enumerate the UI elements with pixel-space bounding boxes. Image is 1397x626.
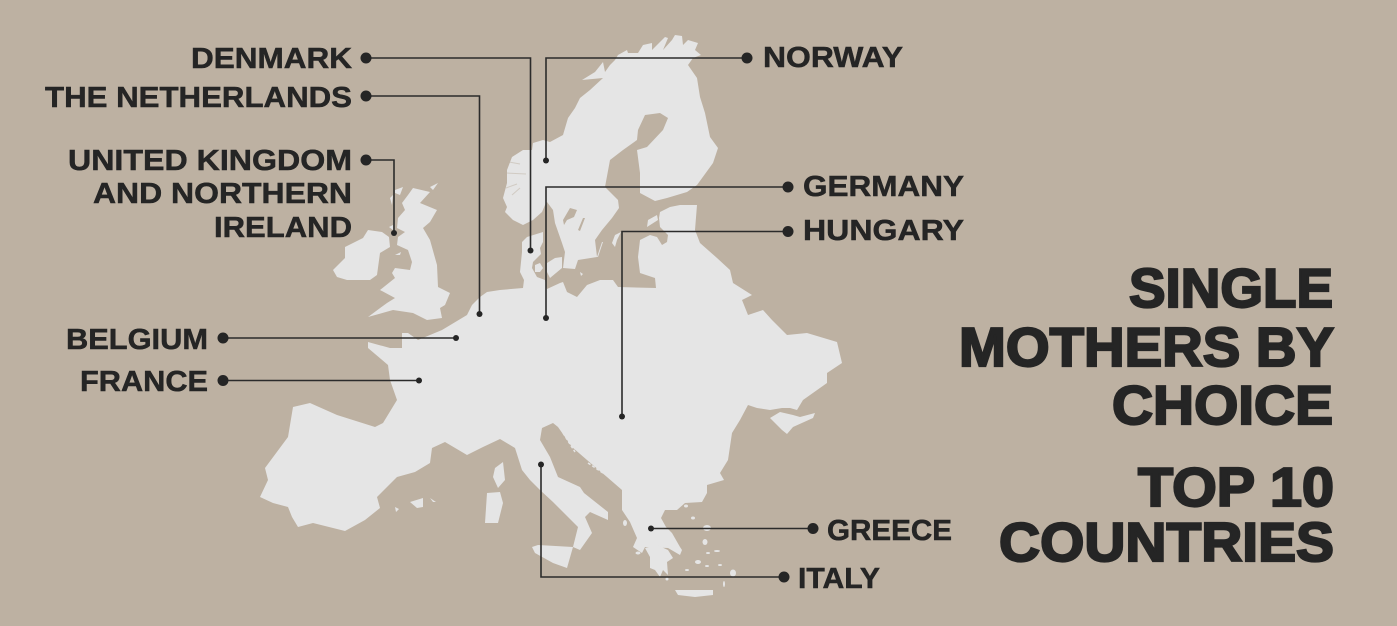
- continental Europe: [260, 205, 842, 555]
- Sardinia: [485, 492, 503, 523]
- leader: Italy: [538, 462, 790, 582]
- Dalmatian islands: [563, 433, 603, 473]
- title: CHOICE: [1112, 374, 1333, 436]
- leader: Germany: [543, 182, 794, 321]
- Peloponnese: [645, 545, 673, 577]
- label: The Netherlands: THE NETHERLANDS: [45, 82, 352, 114]
- label: Germany: GERMANY: [803, 171, 964, 203]
- Baltic islands: [580, 215, 658, 276]
- leader: Greece: [648, 523, 818, 534]
- label: Belgium: BELGIUM: [66, 324, 208, 356]
- leader: United Kingdom: [360, 154, 397, 236]
- Sicily: [532, 545, 573, 568]
- Ireland: [333, 230, 390, 280]
- subtitle: [999, 456, 1334, 573]
- Crimea: [770, 412, 815, 434]
- map of Europe: [260, 35, 842, 597]
- Great Britain: [368, 188, 450, 320]
- label: United Kingdom and Northern Ireland: IRELAND: [214, 212, 352, 244]
- Danish islands: [535, 257, 562, 278]
- title: MOTHERS BY: [959, 316, 1334, 378]
- leader: Norway: [543, 52, 752, 164]
- label: United Kingdom and Northern Ireland: [68, 145, 352, 244]
- title: SINGLE: [1129, 257, 1333, 319]
- Norwegian fjords: [506, 162, 526, 195]
- Scottish islands: [389, 183, 438, 255]
- title: [959, 257, 1334, 436]
- country labels: [45, 42, 964, 595]
- leader: Hungary: [619, 226, 794, 420]
- leader lines: [218, 52, 818, 582]
- label: Denmark: DENMARK: [191, 43, 352, 75]
- label: France: FRANCE: [80, 366, 208, 398]
- leader: Belgium: [218, 332, 459, 344]
- label: United Kingdom and Northern Ireland: AND NORTHERN: [93, 178, 352, 210]
- label: United Kingdom and Northern Ireland: UNITED KINGDOM: [68, 145, 352, 177]
- label: Italy: ITALY: [798, 563, 880, 595]
- Scandinavia and Finland: [503, 35, 718, 269]
- Balearic Islands: [395, 498, 436, 512]
- subtitle: COUNTRIES: [999, 511, 1334, 573]
- leader: The Netherlands: [360, 90, 482, 317]
- leader: France: [218, 375, 422, 386]
- subtitle: TOP 10: [1138, 456, 1334, 518]
- label: Greece: GREECE: [827, 515, 952, 547]
- label: Hungary: HUNGARY: [803, 215, 964, 247]
- Aegean islands: [623, 504, 736, 587]
- Crete: [675, 590, 713, 597]
- Corsica: [493, 462, 505, 488]
- label: Norway: NORWAY: [763, 42, 903, 74]
- leader: Denmark: [360, 52, 534, 254]
